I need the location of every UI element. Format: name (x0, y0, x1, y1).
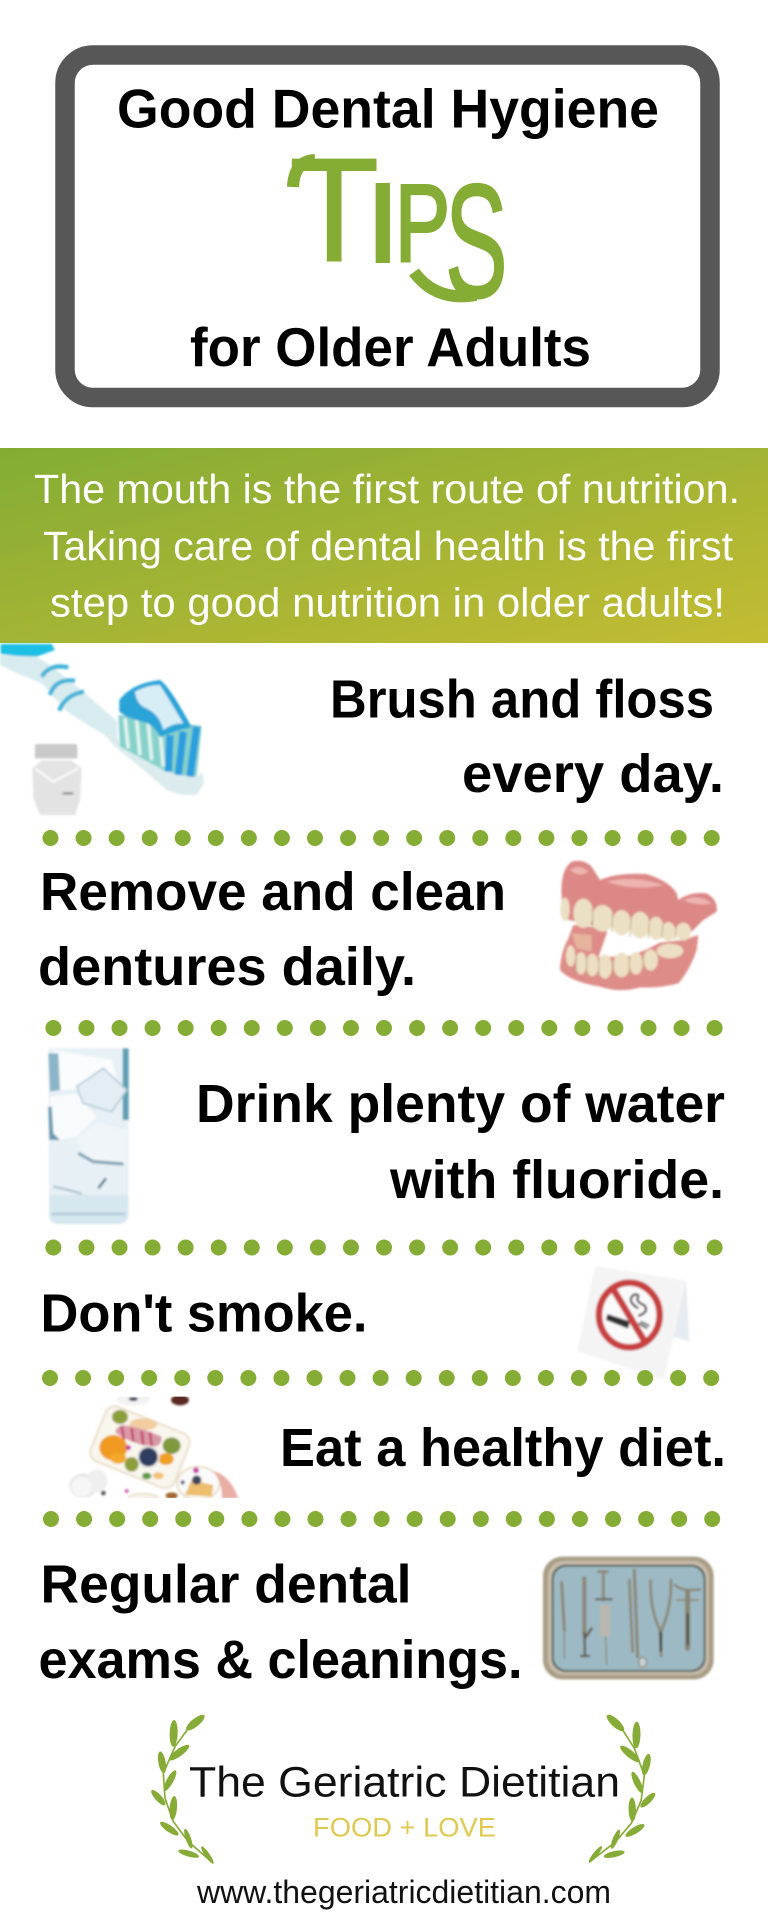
website: www.thegeriatricdietitian.com (196, 1874, 611, 1910)
dot divider 4 (50, 1370, 712, 1386)
tip 4: don't smoke (40, 1266, 689, 1379)
dot divider 5 (51, 1511, 713, 1527)
tip text: with fluoride. (389, 1150, 724, 1210)
tagline: FOOD + LOVE (313, 1812, 496, 1842)
banner text: step to good nutrition in older adults! (50, 580, 725, 626)
dot divider 3 (53, 1240, 715, 1256)
tip text: Brush and floss (330, 670, 714, 730)
tip text (38, 862, 506, 997)
icon: tray of dental tools (543, 1557, 714, 1679)
tip text: Drink plenty of water (196, 1074, 725, 1134)
tip text: Don't smoke. (40, 1284, 368, 1344)
icon: no smoking sign (577, 1266, 689, 1379)
icon: dentures (560, 861, 717, 990)
brand name: The Geriatric Dietitian (189, 1758, 620, 1806)
banner text (34, 466, 740, 626)
tip text (38, 1554, 522, 1690)
tip 2: dentures (38, 861, 717, 997)
title word: Tips (289, 128, 508, 332)
intro banner (0, 448, 768, 643)
tip text (330, 670, 724, 804)
tip 6: dental exams (38, 1554, 714, 1690)
tip text: Regular dental (40, 1554, 412, 1614)
icon: plates of food (69, 1392, 238, 1503)
tip 5: healthy diet (69, 1392, 726, 1503)
title line: for Older Adults: for Older Adults (190, 316, 591, 378)
title word: Tips: P (395, 161, 450, 285)
icon: glass of ice water (48, 1048, 129, 1224)
laurel right (587, 1712, 662, 1868)
tip 3: water (48, 1048, 725, 1224)
title word: Tips: S (445, 151, 508, 332)
tip text: dentures daily. (38, 937, 416, 997)
title word: Tips: T (289, 128, 379, 293)
dot divider 2 (53, 1020, 715, 1036)
dot divider 1 (50, 830, 712, 846)
tip text: Remove and clean (40, 862, 506, 922)
icon: toothbrush and floss (0, 644, 204, 815)
tip text: Eat a healthy diet. (280, 1418, 726, 1478)
logo (149, 1712, 662, 1868)
tip text: exams & cleanings. (38, 1630, 522, 1690)
laurel left (149, 1712, 215, 1865)
banner text: Taking care of dental health is the first (43, 523, 734, 569)
title line: Good Dental Hygiene: Good Dental Hygiene (117, 78, 659, 140)
tip text: every day. (462, 744, 724, 804)
title panel (65, 55, 710, 398)
tip 1: brush and floss (0, 644, 724, 815)
banner text: The mouth is the first route of nutrition. (34, 466, 740, 512)
tip text (196, 1074, 725, 1210)
title word: Tips: I (368, 162, 398, 285)
